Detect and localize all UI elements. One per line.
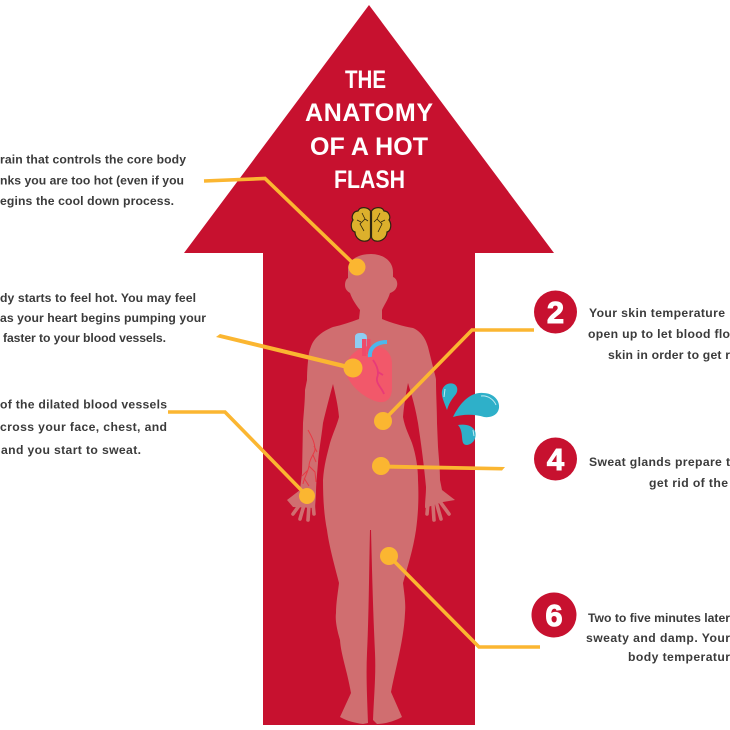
text block: dilated vessels: cross your face, chest, and [0, 420, 167, 434]
text block: step 6: body temperatur [628, 650, 730, 664]
number badge 2 [534, 290, 577, 334]
number badge 4 [534, 438, 577, 480]
text block: step 2: Your skin temperature [589, 306, 725, 320]
number badge 6 [532, 592, 576, 638]
text block: brain [0, 152, 186, 208]
text block: dilated vessels [0, 398, 167, 457]
text block: brain: rain that controls the core body [0, 152, 186, 166]
text block: brain: egins the cool down process. [0, 194, 174, 208]
text block: step 4: get rid of the [649, 476, 728, 490]
text block: step 2: open up to let blood flo [588, 327, 730, 341]
forearm veins [302, 430, 317, 486]
text block: body feels hot: dy starts to feel hot. You may feel [0, 291, 196, 305]
text block: step 4: Sweat glands prepare t [589, 455, 730, 469]
human body silhouette [287, 254, 455, 724]
title: THE [345, 66, 386, 94]
number badge 2: 2 [547, 295, 564, 330]
title: ANATOMY [305, 99, 433, 127]
title: OF A HOT [310, 133, 428, 161]
text block: brain: nks you are too hot (even if you [0, 174, 184, 188]
hands: fingers [293, 503, 449, 520]
leader: step 6 [380, 547, 540, 647]
leader: step 4 [372, 457, 505, 475]
leader: wrist callout [168, 412, 315, 504]
icon: brain [351, 208, 391, 241]
icon: sweat droplets [442, 383, 499, 445]
text block: dilated vessels: and you start to sweat. [1, 443, 141, 457]
text block: step 6 [586, 611, 730, 664]
text block: body feels hot: as your heart begins pumping your [0, 311, 206, 325]
title [305, 66, 433, 194]
number badge 4: 4 [547, 442, 565, 477]
red upward arrow panel [184, 5, 554, 725]
number badge 6: 6 [545, 598, 563, 633]
text block: dilated vessels: of the dilated blood vessels [0, 398, 167, 412]
icon: heart [346, 333, 392, 402]
leader: step 2 [374, 330, 534, 430]
text block: step 4 [589, 455, 730, 490]
title: FLASH [334, 166, 405, 194]
text block: body feels hot: faster to your blood vessels. [3, 331, 166, 345]
leader: heart callout [216, 334, 362, 378]
text block: step 2: skin in order to get r [608, 348, 730, 362]
text block: step 2 [588, 306, 730, 362]
leader: brain callout [204, 178, 366, 276]
text block: body feels hot [0, 291, 206, 345]
text block: step 6: sweaty and damp. Your [586, 631, 730, 645]
text block: step 6: Two to five minutes later [588, 611, 730, 625]
